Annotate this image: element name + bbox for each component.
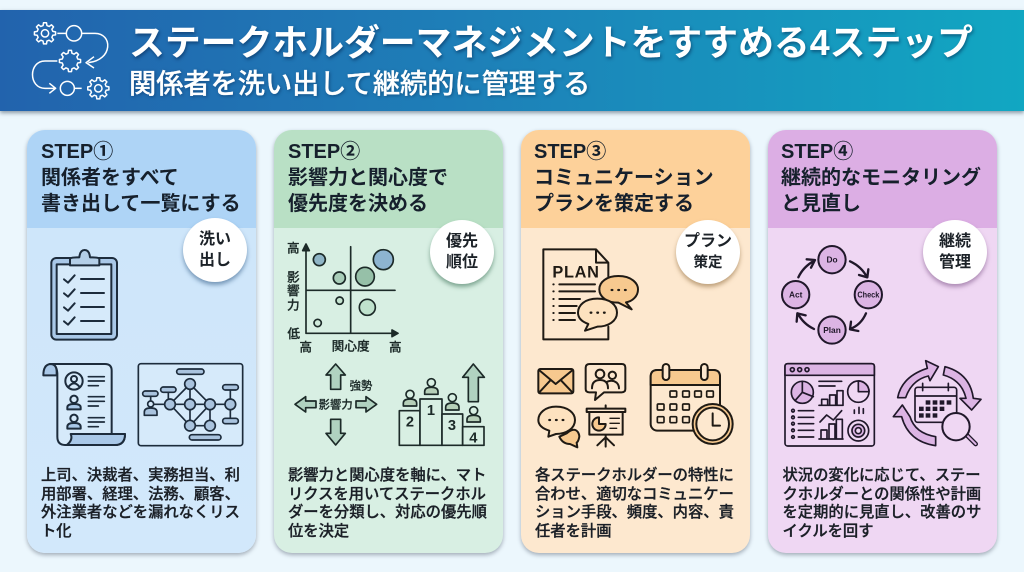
icon: network map bbox=[138, 364, 243, 446]
heading: step 3: コミュニケーション bbox=[534, 167, 714, 189]
chart: influence interest matrix: 関心度 bbox=[332, 339, 370, 354]
description: step 2 bbox=[288, 466, 487, 540]
panel: step 4 bbox=[768, 130, 997, 553]
description: step 2: 影響力と関心度を軸に、マト bbox=[288, 467, 486, 484]
icon: stakeholder list scroll bbox=[43, 364, 125, 445]
chart: influence interest matrix: 高 bbox=[299, 339, 312, 354]
chart: influence interest matrix: 高 bbox=[287, 241, 300, 256]
heading: step 4 bbox=[781, 140, 981, 215]
badge: continuous management: 継続 bbox=[939, 233, 971, 250]
icon: PDCA cycle: Check bbox=[857, 290, 880, 300]
heading: step 2: STEP② bbox=[288, 141, 360, 163]
icon: gears and process flow bbox=[32, 22, 110, 100]
description: step 1: 用部署、経理、法務、顧客、 bbox=[41, 486, 240, 503]
heading: step 3 bbox=[534, 140, 714, 215]
description: step 1: 外注業者などを漏れなくリス bbox=[41, 504, 240, 521]
description: step 2: リクスを用いてステークホル bbox=[288, 486, 486, 503]
badge: continuous management bbox=[923, 220, 987, 284]
chart: influence interest matrix: 高 bbox=[389, 339, 402, 354]
icon: PDCA cycle: Plan bbox=[823, 325, 841, 335]
badge: priority: 優先 bbox=[446, 233, 478, 250]
badge: continuous management: 管理 bbox=[939, 254, 971, 271]
badge: plan: プラン bbox=[684, 232, 732, 250]
heading: step 4: 継続的なモニタリング bbox=[781, 167, 981, 189]
description: step 1: 上司、決裁者、実務担当、利 bbox=[41, 467, 240, 484]
heading: step 2 bbox=[288, 140, 448, 215]
heading: step 1: 書き出して一覧にする bbox=[41, 193, 241, 215]
chart: influence interest matrix bbox=[287, 241, 402, 354]
description: step 3: 合わせ、適切なコミュニケー bbox=[535, 486, 734, 503]
icon: calendar with clock bbox=[651, 364, 733, 444]
badge: wash out: 洗い bbox=[199, 231, 231, 248]
heading: step 1: 関係者をすべて bbox=[41, 167, 179, 189]
icon: priority podium: 3 bbox=[448, 418, 456, 434]
panel: step 2 bbox=[274, 130, 503, 553]
heading: step 4: と見直し bbox=[781, 193, 861, 215]
title: ステークホルダーマネジメントをすすめる4ステップ bbox=[129, 23, 973, 63]
icon: influence direction arrows: 強勢 bbox=[350, 378, 373, 392]
panel: step 1 bbox=[27, 130, 256, 553]
heading: step 2: 優先度を決める bbox=[288, 193, 428, 215]
heading: step 4: STEP④ bbox=[781, 141, 853, 163]
icon: priority podium: 4 bbox=[469, 430, 478, 446]
description: step 4: イクルを回す bbox=[782, 523, 874, 540]
icon: PDCA cycle bbox=[782, 246, 882, 344]
icon: review cycle with calendar and magnifier bbox=[893, 361, 981, 446]
description: step 3: ション手段、頻度、内容、責 bbox=[535, 504, 734, 521]
description: step 2: 位を決定 bbox=[288, 523, 349, 540]
description: step 1: ト化 bbox=[41, 523, 72, 540]
description: step 3 bbox=[535, 466, 734, 540]
badge: wash out bbox=[183, 218, 247, 282]
badge: plan bbox=[676, 220, 740, 284]
icon: influence direction arrows bbox=[295, 364, 377, 445]
icon: monitoring dashboard bbox=[785, 364, 874, 446]
chart: influence interest matrix: 低 bbox=[287, 327, 300, 341]
badge: priority: 順位 bbox=[446, 254, 478, 271]
icon: PDCA cycle: Act bbox=[789, 290, 803, 300]
icon: communication channels bbox=[538, 364, 625, 447]
description: step 2: ダーを分類し、対応の優先順 bbox=[288, 504, 487, 521]
description: step 4: を定期的に見直し、改善のサ bbox=[782, 504, 981, 521]
description: step 4: クホルダーとの関係性や計画 bbox=[782, 486, 981, 503]
chart: influence interest matrix: 力 bbox=[287, 299, 300, 313]
description: step 4 bbox=[782, 466, 981, 540]
icon: plan document with speech bubbles: PLAN bbox=[552, 263, 600, 281]
icon: priority podium bbox=[399, 364, 484, 446]
badge: priority bbox=[430, 220, 494, 284]
icon: priority podium: 1 bbox=[427, 403, 435, 419]
heading: step 2: 影響力と関心度で bbox=[288, 167, 448, 189]
badge: plan: 策定 bbox=[693, 254, 722, 270]
chart: influence interest matrix: 響 bbox=[287, 283, 300, 298]
heading: step 3: STEP③ bbox=[534, 141, 606, 163]
panel: step 3 bbox=[521, 130, 750, 553]
badge: wash out: 出し bbox=[199, 252, 231, 269]
heading: step 1 bbox=[41, 140, 241, 215]
icon: priority podium: 2 bbox=[406, 415, 414, 431]
description: step 1 bbox=[41, 466, 240, 540]
subtitle: 関係者を洗い出して継続的に管理する bbox=[129, 68, 590, 99]
description: step 3: 任者を計画 bbox=[535, 523, 612, 540]
header band bbox=[0, 10, 1024, 111]
chart: influence interest matrix: 影 bbox=[287, 270, 300, 284]
description: step 3: 各ステークホルダーの特性に bbox=[535, 467, 734, 484]
icon: influence direction arrows: 影響力 bbox=[319, 397, 353, 411]
description: step 4: 状況の変化に応じて、ステー bbox=[782, 467, 981, 484]
icon: clipboard checklist bbox=[51, 250, 117, 340]
heading: step 3: プランを策定する bbox=[534, 193, 694, 215]
heading: step 1: STEP① bbox=[41, 141, 113, 163]
icon: PDCA cycle: Do bbox=[826, 255, 838, 265]
icon: plan document with speech bubbles bbox=[543, 249, 638, 339]
